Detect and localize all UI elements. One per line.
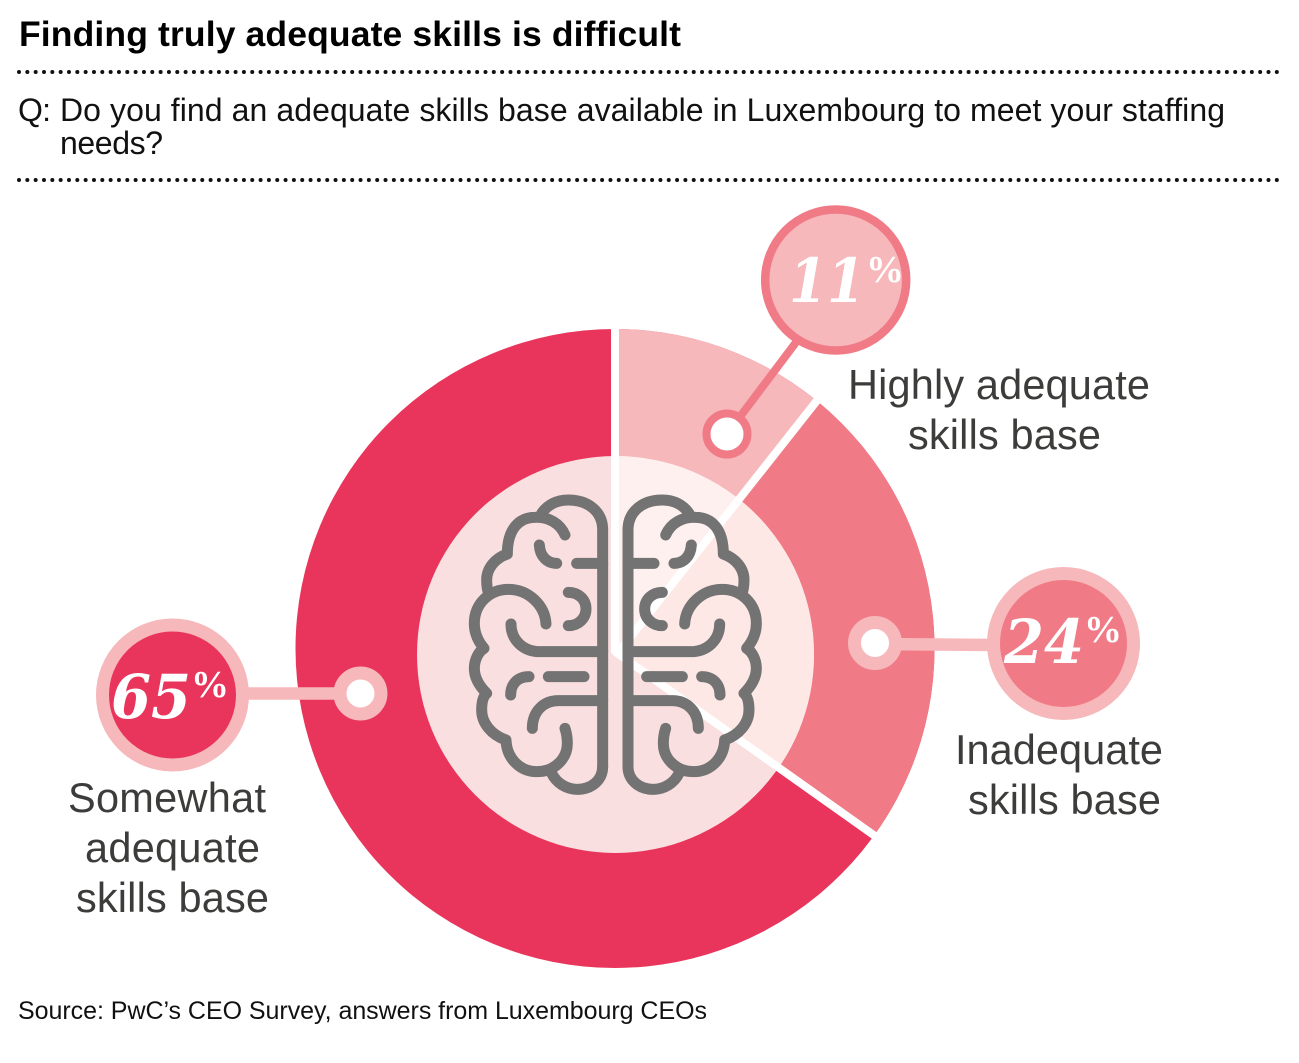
segment: highly adequate 11% (619, 329, 814, 497)
label: somewhat adequate: Somewhat (68, 774, 266, 821)
title: Finding truly adequate skills is difficult (19, 14, 681, 54)
label: somewhat adequate (68, 774, 269, 921)
inner circle left (417, 456, 814, 853)
inner circle right (634, 502, 814, 764)
right hemisphere (628, 500, 756, 789)
label: inadequate: Inadequate (955, 726, 1163, 773)
callout: 65%: % (191, 664, 229, 706)
label: highly adequate: skills base (908, 411, 1101, 458)
callout: 65% (102, 625, 381, 765)
label: inadequate: skills base (968, 776, 1161, 823)
question: needs? (60, 125, 163, 161)
segment: inadequate 24% (742, 404, 934, 832)
label: inadequate (955, 726, 1163, 823)
callout: 65%: 65 (111, 662, 191, 733)
callout: 11%: % (866, 249, 904, 291)
source: Source: PwC’s CEO Survey, answers from Luxembourg CEOs (18, 997, 707, 1025)
label: somewhat adequate: adequate (85, 824, 260, 871)
question: Do you find an adequate skills base available in Luxembourg to meet your staffing (60, 92, 1225, 128)
callout: 24%: 24 (1003, 607, 1084, 678)
callout: 24% (854, 574, 1134, 714)
question: Q: (18, 92, 51, 128)
callout: 24%: % (1084, 609, 1122, 651)
inner circle top (619, 456, 736, 644)
segment: somewhat adequate 65% (296, 329, 934, 968)
callout: 11%: 11 (789, 246, 865, 317)
question (18, 92, 1225, 161)
donut chart (296, 329, 934, 968)
left hemisphere (474, 500, 603, 789)
callout: 11% (706, 210, 906, 454)
label: highly adequate (848, 361, 1150, 458)
label: highly adequate: Highly adequate (848, 361, 1150, 408)
label: somewhat adequate: skills base (76, 874, 269, 921)
icon: brain (474, 500, 756, 789)
